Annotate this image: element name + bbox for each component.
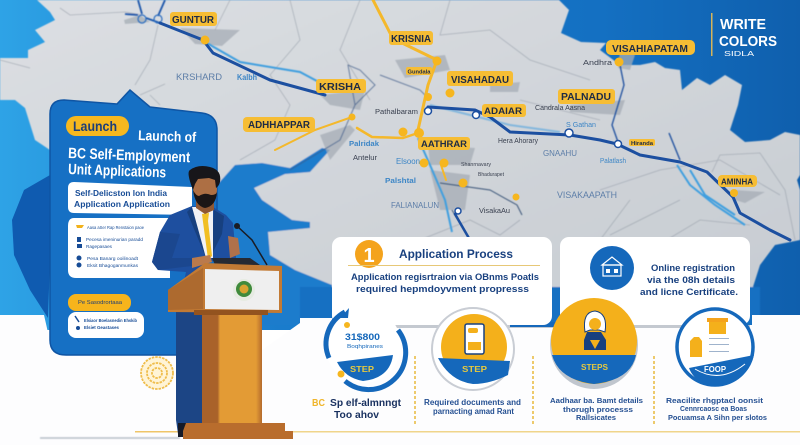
step caption 1: BC: [312, 398, 325, 409]
map: yellow place labels: GUNTUR: [172, 15, 215, 26]
panel text: [640, 263, 738, 298]
step caption 3: Rallsicates: [576, 413, 616, 422]
panel heading: [68, 127, 197, 181]
map: grey and blue place names: Shanrnavary: [461, 162, 491, 168]
map: yellow place labels: KRISHA: [319, 82, 361, 93]
step number badge: [355, 240, 383, 268]
map: location markers: [200, 36, 738, 214]
orange action pill: Pe Sasodrortaaa: [78, 300, 123, 306]
contact card: Elsiaor Boelasnedin Ehskib: [84, 318, 137, 324]
microphone: [237, 226, 267, 265]
step circle 2: STEP: [462, 365, 488, 374]
step circle 1: STEP: [350, 365, 375, 374]
details card: [68, 218, 170, 278]
step caption 4: [666, 396, 767, 422]
map: grey and blue place names: Hera Ahorary: [498, 138, 538, 145]
map: yellow place labels: VISAHIAPATAM: [612, 44, 688, 55]
launch badge: Launch: [73, 118, 117, 134]
map: grey and blue place names: VISAKAAPATH: [557, 190, 617, 200]
step caption 3: thorugh processs: [563, 405, 633, 414]
laptop: [212, 258, 260, 265]
panel heading: BC Self-Employment: [68, 145, 190, 166]
map: grey and blue place names: KRSHARD: [176, 72, 223, 82]
trousers: [176, 310, 203, 434]
panel text: required hepmdoyvment propresss: [356, 284, 529, 295]
details card: Eksit Bhagoganmunkas: [87, 263, 139, 268]
arms and hands: [152, 232, 194, 270]
lectern column: [202, 314, 262, 424]
icon: applicant: [584, 311, 606, 350]
map: yellow place labels: VISAHADAU: [451, 75, 509, 86]
step caption 1: Sp elf-almnngt: [330, 398, 402, 409]
panel text: and licne Certificate.: [640, 287, 738, 298]
brand block: SIDLA: [724, 49, 754, 58]
map: grey and blue place names: S Gathan: [566, 122, 596, 129]
icon: document phone: [465, 324, 484, 354]
panel text: via the 08h details: [647, 275, 735, 286]
map: grey and blue place names: Palridak: [349, 141, 379, 148]
step circle 3: STEPS: [581, 363, 609, 372]
step caption 2: parnacting amad Rant: [433, 407, 514, 416]
launch badge: [66, 116, 129, 136]
step caption 4: Reacilite rhgptacl oonsit: [666, 396, 764, 405]
jacket: [152, 206, 236, 312]
icon: form and bag: [690, 318, 729, 357]
map: grey and blue place names: [176, 60, 626, 215]
lectern top: [168, 263, 282, 313]
step circle 2: [432, 308, 514, 390]
map: yellow place labels: Hiranda: [631, 141, 653, 147]
shirt and tie: [192, 207, 213, 258]
subtitle card: [68, 182, 192, 215]
map: yellow place labels: AATHRAR: [421, 139, 468, 149]
step circle 1: 31$800: [345, 332, 380, 342]
map: grey and blue place names: Candrala Aasna: [535, 105, 585, 112]
step caption 4: Cennrcaosc ea Boas: [680, 404, 747, 413]
panel: application process: [332, 237, 750, 328]
orange action pill: [68, 294, 131, 311]
map: grey and blue place names: Antelur: [353, 155, 378, 162]
bottom rule: [293, 431, 800, 432]
map: yellow place labels: Gundala: [408, 70, 431, 76]
icon: building: [590, 246, 634, 290]
map: shaded regions: [124, 15, 765, 210]
map: yellow place labels: ADHHAPPAR: [248, 120, 311, 131]
map: main blue routes: [160, 23, 790, 240]
map: grey and blue place names: Elsoon: [396, 157, 420, 166]
panel heading: Unit Applications: [68, 161, 166, 181]
details card: Aasa aSer Rap Renstaion paoe: [87, 225, 144, 230]
details card: Ragepasaes: [86, 244, 113, 249]
floor line and shadow: [40, 431, 215, 439]
contact card: Elsiet Geastases: [84, 325, 119, 331]
map: yellow place labels: KRISNIA: [391, 34, 431, 45]
map: yellow place labels: PALNADU: [561, 92, 611, 103]
panel heading: Application Process: [399, 247, 513, 261]
step caption 3: Aadhaar ba. Bamt details: [550, 396, 643, 405]
step circle 4: FOOP: [704, 365, 727, 374]
step caption 1: Too ahov: [334, 410, 379, 421]
panel text: [351, 272, 539, 295]
subtitle card: Application Application: [74, 199, 170, 209]
left dark blue blob: [12, 175, 52, 318]
panel text: Online registration: [651, 263, 735, 274]
left information panel: [50, 90, 217, 355]
map: grey and blue place names: FALIANALUN: [391, 200, 439, 210]
details card: Pesa Banarg ooilinoadt: [87, 256, 139, 261]
step caption 3: [550, 396, 643, 422]
map: yellow place labels: [170, 12, 757, 187]
map: yellow place labels: ADAIAR: [484, 106, 523, 116]
map: grey and blue place names: Andhra: [583, 60, 612, 67]
step circle 3: [550, 298, 638, 389]
panel heading: Launch of: [138, 127, 197, 145]
decorative marigold emblem: [141, 357, 173, 389]
step number badge: 1: [363, 245, 375, 267]
map: boundaries and rivers: [0, 0, 795, 240]
lectern crest: [233, 279, 255, 301]
map: grey and blue place names: Kalbh: [237, 73, 257, 82]
map: grey and blue place names: Pathalbaram: [375, 109, 418, 116]
subtitle card: Self-Delicston lon India: [75, 188, 167, 198]
map: grey and blue place names: Palshtal: [385, 176, 416, 185]
brand block: WRITE: [720, 16, 766, 33]
map: grey and blue place names: Bhadurapet: [478, 172, 504, 178]
lectern base: [183, 423, 293, 439]
step circle 1: [325, 307, 406, 390]
step caption 1: [312, 398, 402, 421]
neck and head: [196, 195, 214, 214]
map: grey and blue place names: GNAAHU: [543, 149, 577, 158]
step circle 1: Boqhpiranes: [347, 344, 384, 350]
map: yellow place labels: AMINHA: [721, 176, 753, 186]
step circle 4: [677, 309, 754, 385]
map: grey and blue place names: VisakaAu: [479, 206, 510, 215]
panel text: Application regisrtraion via OBnms Poatls: [351, 272, 539, 283]
step caption 2: [424, 398, 521, 416]
details card: Pecesa imeninurian paradd: [86, 237, 144, 242]
step caption 4: Pocuamsa A Sihn per slotos: [668, 413, 767, 422]
speaker at lectern: [152, 166, 293, 439]
panel: online registration: [560, 237, 750, 325]
brand block: COLORS: [719, 33, 777, 50]
dashed step dividers: [415, 356, 654, 425]
map: land mass: [0, 0, 800, 327]
map: yellow routes: [275, 0, 446, 180]
contact card: [68, 312, 144, 338]
map background: sea: [0, 0, 800, 330]
map: grey and blue place names: Palatlash: [600, 158, 626, 165]
step caption 2: Required documents and: [424, 398, 521, 407]
brand block: [711, 13, 777, 58]
white lower background: [0, 315, 800, 445]
